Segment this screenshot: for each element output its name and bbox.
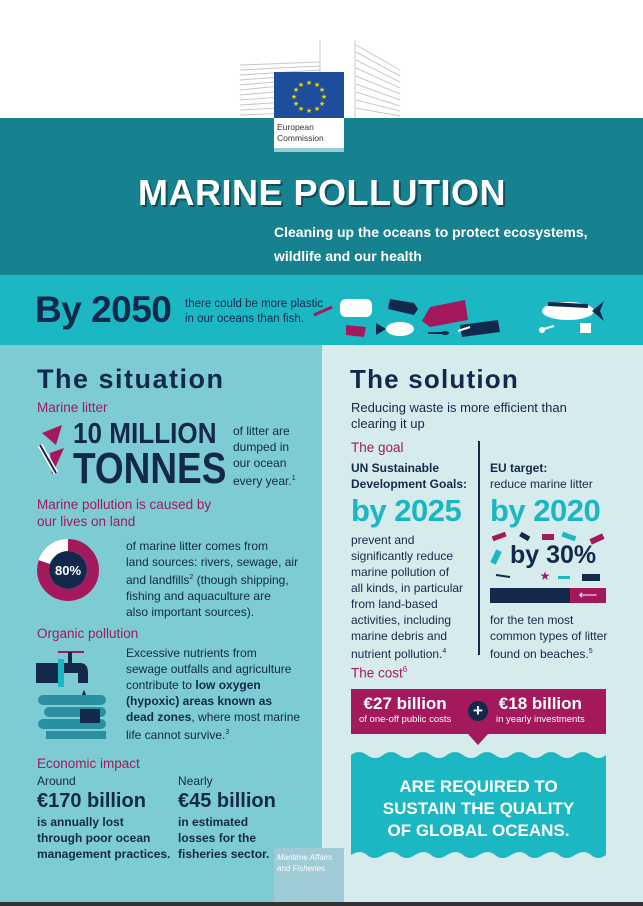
text: litter dumped (233, 424, 296, 488)
subtitle: wildlife and our health (274, 248, 422, 264)
logo: European Commission: ★ (314, 81, 320, 89)
text: litter dumped: our ocean (233, 456, 286, 470)
callout: cost box: + (473, 701, 483, 720)
banner: by 2050: in our oceans than fish. (185, 313, 304, 325)
logo: European Commission: ★ (306, 107, 312, 115)
column: EU target: common types of litter (490, 629, 607, 643)
subheading: caused by land: our lives on land (37, 514, 135, 529)
header band (0, 118, 643, 275)
label: maritime affairs: Maritime Affairs (277, 853, 332, 862)
stat: 45 billion: fisheries sector. (178, 847, 269, 861)
column: EU target (490, 461, 608, 661)
stat: 170 billion: is annually lost (37, 815, 124, 829)
text: nutrients (126, 646, 300, 742)
stat: 170 billion (37, 774, 170, 861)
graphic: by 30% (490, 532, 605, 583)
stat: 45 billion: losses for the (178, 831, 256, 845)
logo: European Commission: ★ (319, 86, 325, 94)
stat: 45 billion: Nearly (178, 774, 213, 788)
text: land sources: fishing and aquaculture are (126, 589, 271, 603)
logo: European Commission: ★ (314, 105, 320, 113)
callout: cost box (351, 689, 606, 745)
heading: the solution: The solution (350, 364, 519, 394)
stat: 170 billion: through poor ocean (37, 831, 150, 845)
icons: plastic and fish (314, 299, 604, 337)
stat: 170 billion: Around (37, 774, 76, 788)
stat: 45 billion: in estimated (178, 815, 248, 829)
chart: 80% donut: 80% (55, 563, 81, 578)
text: land sources: land sources: rivers, sewage, air (126, 555, 298, 569)
text: litter dumped: every year.1 (233, 474, 296, 488)
text: nutrients: dead zones, where most marine (126, 710, 300, 724)
banner: by 2050: there could be more plastic (185, 298, 323, 310)
logo: European Commission: ★ (291, 93, 297, 101)
column: UN goal: marine debris and (351, 629, 447, 643)
stat: 10 million tonnes (73, 418, 226, 493)
panel: the solution (322, 345, 643, 902)
logo: European Commission: ★ (293, 86, 299, 94)
text: litter dumped: of litter are (233, 424, 290, 438)
column: EU target: for the ten most (490, 613, 573, 627)
panel: the situation (0, 345, 322, 902)
callout: cost box: in yearly investments (496, 714, 585, 725)
subheading: economic impact: Economic impact (37, 756, 140, 771)
callout: cost box: €18 billion (499, 694, 582, 713)
stat: 170 billion: management practices. (37, 847, 170, 861)
text: reducing waste (351, 400, 567, 431)
subheading: caused by land: Marine pollution is caused by (37, 497, 211, 512)
label: maritime affairs: and Fisheries (277, 864, 325, 873)
column: UN goal: activities, including (351, 613, 451, 627)
label: maritime affairs (274, 848, 344, 902)
heading: the situation: The situation (37, 364, 224, 394)
column: UN goal: nutrient pollution.4 (351, 647, 446, 661)
chart: 80% donut (37, 539, 99, 601)
stat: 10 million tonnes: TONNES (73, 444, 226, 493)
column: EU target: by 2020 (490, 493, 600, 528)
logo: European Commission: ★ (293, 100, 299, 108)
graphic: by 30%: by 30% (510, 541, 596, 569)
bar: reduction arrow (490, 588, 606, 603)
column: UN goal: marine pollution of (351, 565, 449, 579)
column: UN goal: all kinds, in particular (351, 581, 463, 595)
stat: 10 million tonnes: 10 MILLION (73, 418, 217, 450)
column: UN goal: UN Sustainable (351, 461, 439, 475)
text: reducing waste: clearing it up (351, 416, 425, 431)
text: nutrients: contribute to low oxygen (126, 678, 261, 692)
banner: by 2050: By 2050 (35, 289, 171, 330)
subheading: the cost: The cost6 (351, 665, 407, 680)
text: nutrients: (hypoxic) areas known as (126, 694, 272, 708)
icon: litter (38, 425, 64, 475)
subheading: marine litter: Marine litter (37, 400, 108, 415)
column: EU target: EU target: (490, 461, 547, 475)
text: litter dumped: dumped in (233, 440, 289, 454)
text: nutrients: sewage outfalls and agriculture (126, 662, 291, 676)
text: reducing waste: Reducing waste is more efficient than (351, 400, 567, 415)
logo: European Commission (274, 72, 344, 152)
logo: European Commission: ★ (321, 93, 327, 101)
logo: European Commission: European (277, 122, 314, 132)
logo: European Commission: ★ (306, 79, 312, 87)
subtitle: Cleaning up the oceans to protect ecosystems, (274, 224, 588, 240)
column: UN goal: from land-based (351, 597, 438, 611)
callout: cost box: €27 billion (364, 694, 447, 713)
callout: required to sustain: SUSTAIN THE QUALITY (383, 799, 574, 818)
logo: European Commission: ★ (319, 100, 325, 108)
subheading: caused by land (37, 497, 212, 529)
graphic: by 30%: ★ (540, 569, 550, 583)
text: nutrients: Excessive nutrients from (126, 646, 257, 660)
callout: required to sustain: ARE REQUIRED TO (399, 777, 558, 796)
subtitle (274, 224, 588, 264)
column: UN goal: significantly reduce (351, 549, 453, 563)
banner: by 2050 (0, 275, 643, 345)
icon: tap and water (36, 651, 106, 739)
callout: required to sustain: OF GLOBAL OCEANS. (388, 821, 569, 840)
column: EU target: found on beaches.5 (490, 647, 593, 661)
text: land sources: and landfills2 (though shipping, (126, 573, 289, 587)
subheading: the goal: The goal (351, 440, 404, 455)
column: EU target: reduce marine litter (490, 477, 593, 491)
subheading: organic pollution: Organic pollution (37, 626, 138, 641)
column: UN goal: by 2025 (351, 493, 461, 528)
column: UN goal: prevent and (351, 533, 414, 547)
logo: European Commission: Commission (277, 133, 324, 143)
header background building (0, 0, 643, 118)
text: land sources: also important sources). (126, 605, 254, 619)
stat: 170 billion: €170 billion (37, 790, 146, 812)
callout: required to sustain (351, 752, 606, 858)
callout: cost box: of one-off public costs (359, 714, 451, 725)
text: land sources: of marine litter comes from (126, 539, 268, 553)
stat: 45 billion (178, 774, 276, 861)
text: land sources (126, 539, 298, 619)
column: UN goal (351, 461, 467, 661)
title: MARINE POLLUTION (138, 172, 506, 213)
column: UN goal: Development Goals: (351, 477, 467, 491)
logo: European Commission: ★ (298, 81, 304, 89)
text: nutrients: life cannot survive.3 (126, 728, 229, 742)
stat: 45 billion: €45 billion (178, 790, 276, 812)
logo: European Commission: ★ (298, 105, 304, 113)
bar: reduction arrow: ⟵ (579, 587, 597, 602)
